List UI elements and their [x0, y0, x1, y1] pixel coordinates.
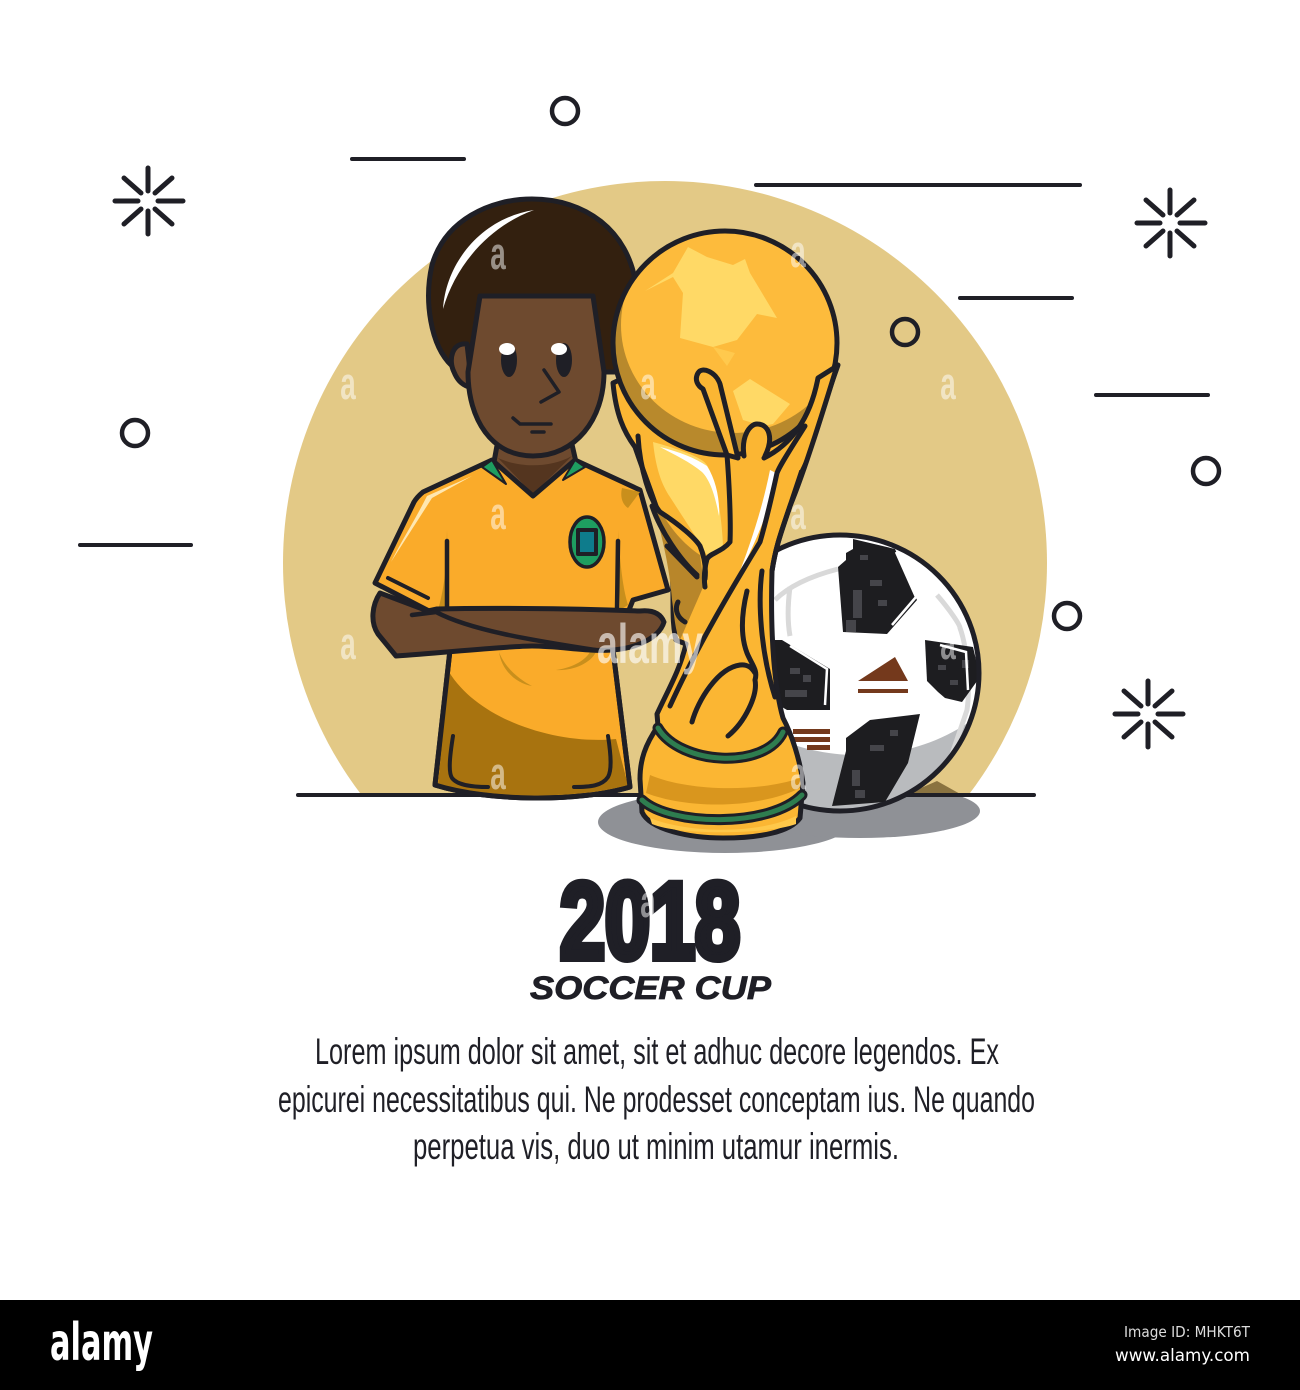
watermark tiles: a — [790, 488, 807, 539]
ball floor shade — [905, 781, 962, 795]
trophy right edge — [772, 366, 837, 571]
watermark tiles: a — [640, 876, 657, 927]
player eyes — [499, 343, 572, 377]
watermark tiles: a — [490, 228, 507, 279]
ball panel left — [770, 640, 830, 710]
crossed arms — [373, 593, 664, 656]
shirt creases — [447, 541, 618, 610]
watermark tiles: a — [790, 748, 807, 799]
watermark tiles: a — [490, 488, 507, 539]
figure right arm — [764, 366, 837, 470]
hair highlight — [443, 210, 534, 309]
figure head — [743, 424, 770, 458]
watermark tiles: a — [640, 358, 657, 409]
watermark tiles — [340, 226, 957, 927]
badge centre — [578, 530, 596, 554]
shirt fold shadows — [438, 488, 640, 686]
trophy swirl lines — [638, 436, 705, 622]
heading: soccer cup: SOCCER CUP — [530, 970, 772, 1006]
icon: star burst top right — [1137, 190, 1205, 256]
shirt outline repeat — [435, 650, 630, 798]
ball panel bottom — [832, 714, 920, 806]
shirt highlight — [391, 476, 472, 562]
player hair — [429, 199, 636, 372]
decorative lines — [80, 159, 1208, 545]
image id: Image ID: MHKT6T — [1124, 1323, 1251, 1341]
icon: star burst bottom right — [1115, 681, 1183, 747]
player shirt — [375, 460, 668, 798]
trophy — [613, 217, 845, 838]
ball panel right — [925, 640, 980, 702]
footer logo: alamy — [50, 1313, 153, 1373]
ball panel top — [838, 539, 917, 634]
figure body lines — [692, 571, 775, 736]
footer bar — [0, 1300, 1300, 1390]
watermark tiles: a — [940, 358, 957, 409]
player neck — [494, 440, 576, 498]
body text: perpetua vis, duo ut minim utamur inermis. — [413, 1126, 899, 1167]
base shading — [646, 775, 800, 804]
base lower light — [650, 816, 796, 832]
floor line — [298, 793, 1034, 797]
website: www.alamy.com — [1115, 1346, 1250, 1366]
ball panel pixels — [785, 555, 969, 798]
floor shadow — [598, 784, 980, 853]
player ear — [451, 344, 472, 388]
shirt hem folds — [450, 736, 611, 787]
trophy lower band — [642, 795, 802, 820]
body text — [278, 1031, 1035, 1167]
watermark tiles: a — [940, 618, 957, 669]
trophy left shading — [640, 452, 704, 640]
shirt badge — [570, 517, 604, 567]
player nose and mouth — [513, 370, 559, 432]
heading: 2018: 2018 — [560, 860, 740, 981]
player face — [468, 296, 604, 456]
soccer player — [373, 199, 668, 798]
watermark tiles: a — [340, 358, 357, 409]
decorative circles — [122, 98, 1219, 629]
ball outline — [701, 535, 979, 811]
soccer ball — [774, 532, 982, 814]
forearm line — [412, 612, 595, 650]
ball logo — [858, 657, 908, 693]
trophy pale highlight — [653, 442, 723, 555]
trophy upper band — [658, 728, 783, 758]
ball stripes — [793, 729, 830, 750]
watermark tiles: a — [790, 226, 807, 277]
watermark logo: alamy — [597, 612, 703, 675]
sleeve cuff line — [388, 578, 428, 598]
ball fill — [701, 535, 979, 811]
figure highlight — [737, 470, 778, 579]
figure left arm — [696, 370, 738, 458]
watermark tiles: a — [340, 618, 357, 669]
shirt lower shadow — [438, 672, 628, 795]
neck shadow — [498, 456, 572, 494]
globe — [613, 217, 845, 455]
ball chevrons — [790, 552, 968, 705]
ball seams — [775, 569, 968, 760]
figure torso lines — [670, 426, 805, 706]
collar right — [563, 460, 585, 480]
trophy white highlight — [660, 447, 719, 516]
trophy body — [613, 330, 838, 838]
collar left — [482, 460, 506, 484]
ball lower shading — [797, 724, 966, 808]
watermark tiles: a — [490, 748, 507, 799]
background circle — [283, 181, 1047, 793]
body text: Lorem ipsum dolor sit amet, sit et adhuc decore legendos. Ex — [315, 1031, 999, 1072]
icon: star burst left — [115, 168, 183, 234]
